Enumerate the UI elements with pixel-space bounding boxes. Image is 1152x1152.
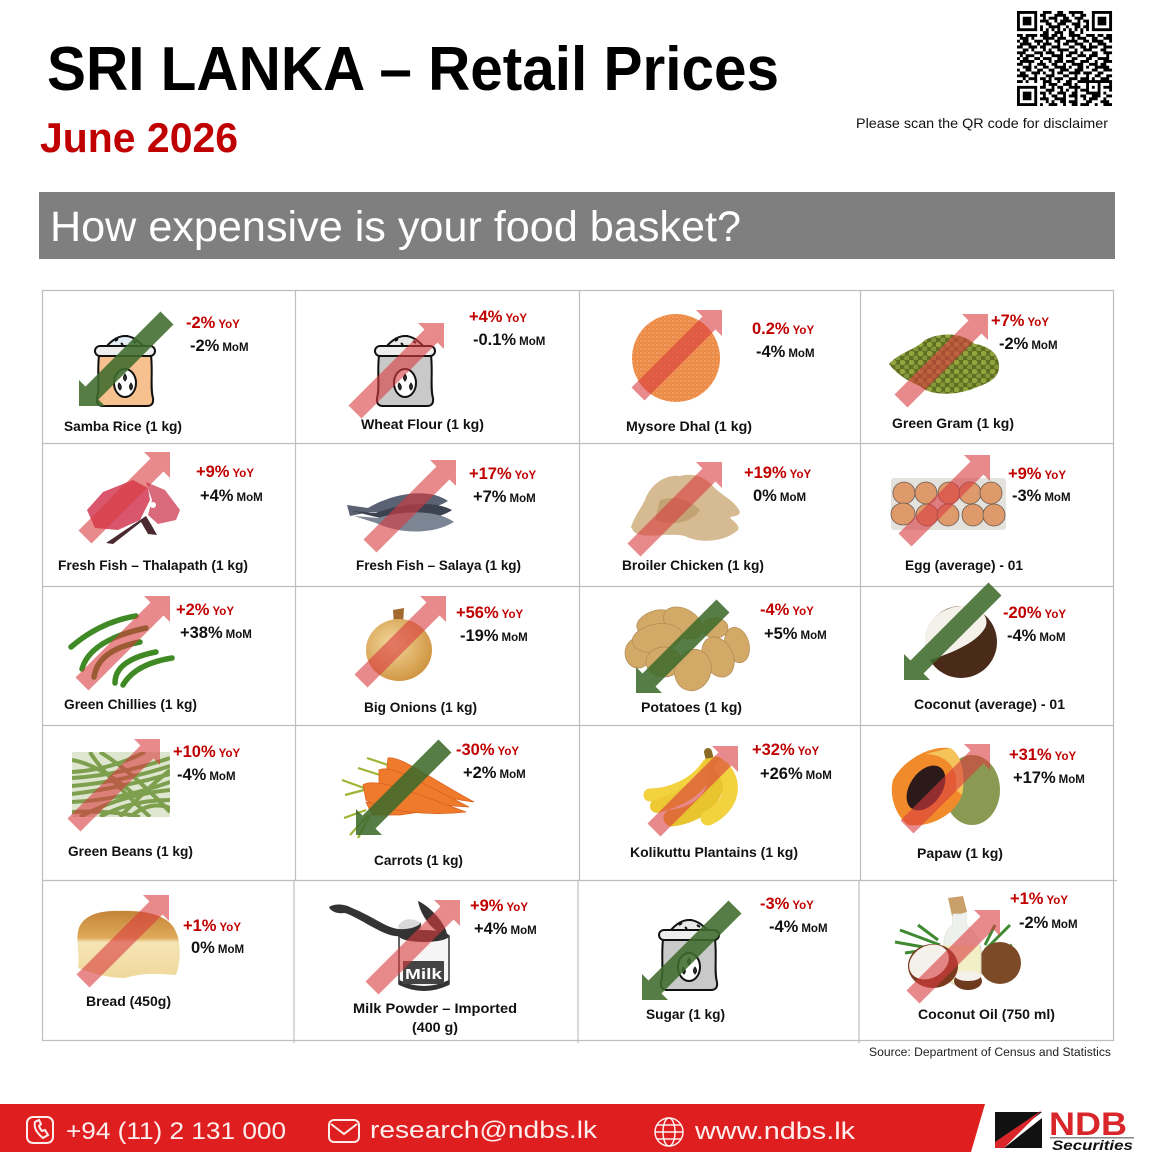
logo: NDB Securities: NDB — [1049, 1106, 1127, 1142]
arrow: up — [78, 452, 170, 544]
image: green gram pile — [889, 334, 999, 394]
MoM change: +26% MoM — [760, 765, 832, 783]
image: egg tray — [891, 478, 1006, 530]
YoY change: -30% YoY — [456, 741, 519, 759]
MoM change: 0% MoM — [191, 939, 244, 957]
email address: research@ndbs.lk — [370, 1117, 598, 1144]
title: SRI LANKA – Retail Prices — [47, 35, 779, 104]
YoY change: +4% YoY — [469, 308, 527, 326]
image: milk can and spoon: Milk — [405, 966, 443, 983]
image: red lentils — [632, 314, 720, 402]
panel: big onions — [354, 596, 528, 715]
banner: food basket heading: How expensive is your food basket? — [50, 203, 741, 251]
website: www.ndbs.lk — [694, 1118, 856, 1145]
image: raw chicken — [631, 475, 740, 541]
YoY change: -4% YoY — [760, 601, 814, 619]
label — [353, 1000, 517, 1035]
QR code — [1017, 12, 1112, 105]
arrow: down — [636, 600, 730, 693]
panel: coconut — [904, 582, 1066, 712]
MoM change: -0.1% MoM — [473, 331, 545, 349]
arrow: up — [366, 900, 460, 994]
YoY change: +31% YoY — [1009, 746, 1077, 764]
label: Potatoes (1 kg) — [641, 699, 742, 715]
YoY change: +56% YoY — [456, 604, 524, 622]
panel: salaya — [347, 460, 537, 573]
YoY change: +19% YoY — [744, 464, 812, 482]
icon: wheat flour sack — [375, 336, 435, 406]
MoM change: -2% MoM — [1019, 914, 1078, 932]
image: bread loaf — [77, 911, 180, 978]
image: papaya — [892, 748, 1000, 825]
source note: Source: Department of Census and Statistics — [869, 1047, 1111, 1059]
panel: potatoes — [625, 600, 827, 715]
panel: broiler chicken — [622, 462, 812, 573]
panel: samba rice — [64, 312, 249, 434]
arrow: up — [632, 310, 722, 400]
YoY change: +9% YoY — [470, 897, 528, 915]
label: Sugar (1 kg) — [646, 1006, 725, 1022]
panel: sugar — [642, 895, 828, 1022]
image: salaya fish — [347, 493, 454, 532]
MoM change: -4% MoM — [769, 918, 828, 936]
label: Broiler Chicken (1 kg) — [622, 557, 764, 573]
arrow: up — [898, 455, 990, 546]
label: Egg (average) - 01 — [905, 557, 1023, 573]
image: onion — [366, 608, 432, 681]
label: Fresh Fish – Salaya (1 kg) — [356, 557, 521, 573]
YoY change: +1% YoY — [1010, 890, 1068, 908]
arrow: up — [628, 462, 722, 556]
arrow: down — [642, 900, 742, 1000]
icon: globe — [655, 1118, 683, 1146]
MoM change: -4% MoM — [756, 343, 815, 361]
MoM change: +4% MoM — [474, 920, 537, 938]
label: Carrots (1 kg) — [374, 852, 463, 868]
MoM change: -2% MoM — [190, 337, 249, 355]
arrow: up — [648, 746, 738, 836]
YoY change: +1% YoY — [183, 917, 241, 935]
YoY change: +32% YoY — [752, 741, 820, 759]
image: potatoes — [625, 600, 753, 696]
label: Mysore Dhal (1 kg) — [626, 418, 752, 434]
image: milk can and spoon — [329, 901, 449, 991]
arrow: down — [79, 312, 174, 406]
YoY change: +7% YoY — [991, 312, 1049, 330]
label: Green Chillies (1 kg) — [64, 696, 197, 712]
arrow: up — [364, 460, 456, 552]
banner: food basket heading — [39, 192, 1115, 259]
QR disclaimer note: Please scan the QR code for disclaimer — [856, 115, 1108, 131]
arrow: up — [354, 596, 446, 688]
arrow: up — [68, 739, 160, 832]
YoY change: +9% YoY — [1008, 465, 1066, 483]
label: Green Beans (1 kg) — [68, 843, 193, 859]
phone number: +94 (11) 2 131 000 — [66, 1118, 286, 1145]
MoM change: -19% MoM — [460, 627, 528, 645]
label: Coconut Oil (750 ml) — [918, 1006, 1055, 1022]
MoM change: -4% MoM — [177, 766, 236, 784]
arrow: down — [904, 582, 1002, 680]
subtitle: date: June 2026 — [40, 114, 238, 161]
label: Green Gram (1 kg) — [892, 415, 1014, 431]
footer band — [0, 1104, 985, 1152]
panel: papaw — [892, 744, 1085, 861]
MoM change: -2% MoM — [999, 335, 1058, 353]
YoY change: +10% YoY — [173, 743, 241, 761]
YoY change: -3% YoY — [760, 895, 814, 913]
arrow: up — [906, 910, 1000, 1004]
YoY change: -20% YoY — [1003, 604, 1066, 622]
arrow: up — [900, 744, 990, 834]
MoM change: 0% MoM — [753, 487, 806, 505]
label: Samba Rice (1 kg) — [64, 418, 182, 434]
image: carrots — [342, 758, 474, 838]
MoM change: +17% MoM — [1013, 769, 1085, 787]
label: Coconut (average) - 01 — [914, 696, 1065, 712]
arrow: up — [894, 314, 988, 408]
MoM change: +4% MoM — [200, 487, 263, 505]
arrow: down — [356, 740, 452, 835]
panel: wheat flour — [348, 308, 545, 432]
image: thalapath fish steaks — [87, 480, 180, 544]
label: Milk Powder – Imported — [353, 1000, 517, 1016]
YoY change: 0.2% YoY — [752, 320, 814, 338]
image: coconut oil bottle with coconuts — [895, 896, 1021, 990]
image: coconut half — [925, 606, 997, 678]
arrow: up — [76, 596, 170, 690]
panel: kolikuttu plantains — [630, 741, 832, 860]
label: Kolikuttu Plantains (1 kg) — [630, 844, 798, 860]
YoY change: -2% YoY — [186, 314, 240, 332]
label: Big Onions (1 kg) — [364, 699, 477, 715]
icon: mail — [329, 1120, 359, 1142]
arrow: up — [348, 323, 444, 418]
panel: carrots — [342, 740, 526, 868]
panel: milk powder — [329, 897, 537, 1035]
arrow: up — [76, 895, 169, 988]
MoM change: +2% MoM — [463, 764, 526, 782]
icon: samba rice sack — [95, 336, 155, 406]
logo: NDB Securities — [995, 1106, 1134, 1152]
icon: sugar sack — [659, 920, 719, 990]
MoM change: +5% MoM — [764, 625, 827, 643]
MoM change: -4% MoM — [1007, 627, 1066, 645]
label: (400 g) — [412, 1019, 458, 1035]
label: Papaw (1 kg) — [917, 845, 1003, 861]
YoY change: +17% YoY — [469, 465, 537, 483]
panel: eggs — [891, 455, 1071, 573]
panel: bread — [76, 895, 244, 1009]
panel: green gram — [889, 312, 1058, 431]
image: green beans — [72, 752, 170, 817]
image: green chillies — [71, 616, 172, 685]
YoY change: +9% YoY — [196, 463, 254, 481]
panel: coconut oil — [895, 890, 1078, 1022]
icon: phone — [27, 1117, 53, 1143]
label: Fresh Fish – Thalapath (1 kg) — [58, 557, 248, 573]
panel: green beans — [68, 739, 241, 859]
panel: thalapath — [58, 452, 263, 573]
MoM change: -3% MoM — [1012, 487, 1071, 505]
image: bananas — [650, 752, 730, 818]
label: Bread (450g) — [86, 993, 171, 1009]
panel: mysore dhal — [626, 310, 815, 434]
MoM change: +38% MoM — [180, 624, 252, 642]
MoM change: +7% MoM — [473, 488, 536, 506]
YoY change: +2% YoY — [176, 601, 234, 619]
panel: green chillies — [64, 596, 252, 712]
label: Wheat Flour (1 kg) — [361, 416, 484, 432]
